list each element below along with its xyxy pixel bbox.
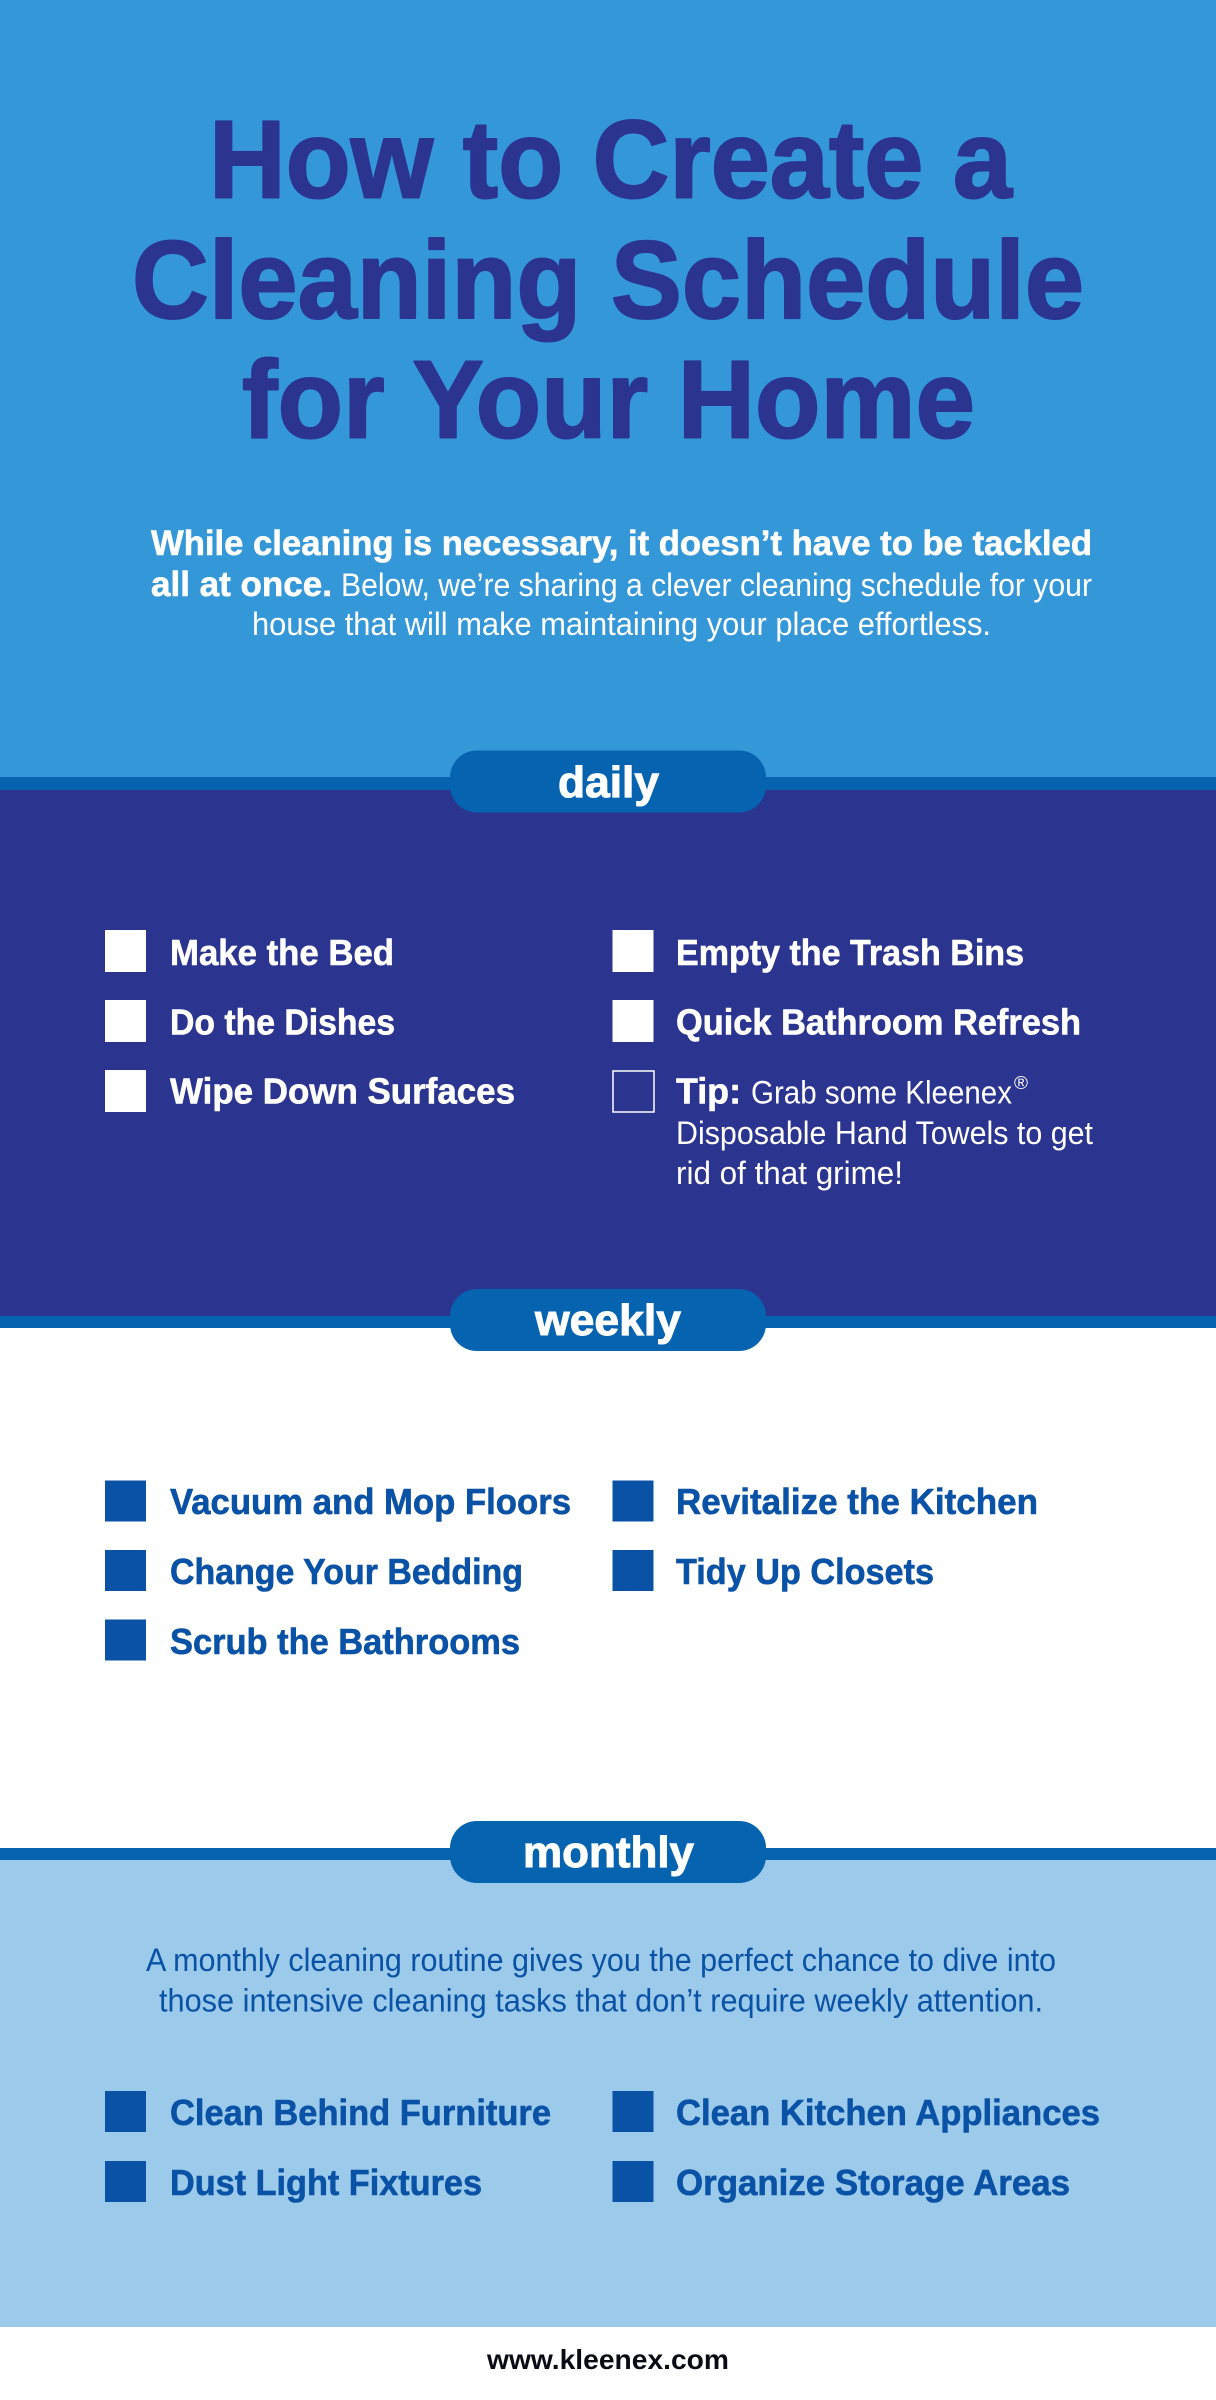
- monthly checklist right: Clean Kitchen Appliances: [676, 2092, 1100, 2133]
- tip: Tip:: [676, 1070, 741, 1112]
- intro text: While cleaning is necessary, it doesn’t have to be tackled: [151, 524, 1092, 563]
- weekly checklist right: [612, 1480, 1038, 1592]
- heading: weekly: weekly: [534, 1296, 682, 1345]
- monthly intro text: those intensive cleaning tasks that don’t require weekly attention.: [159, 1982, 1043, 2018]
- heading: daily: daily: [558, 758, 660, 807]
- monthly checklist right: Organize Storage Areas: [676, 2162, 1070, 2203]
- intro text: house that will make maintaining your place effortless.: [252, 606, 991, 642]
- monthly checklist left: [105, 2091, 551, 2203]
- tip: Grab some Kleenex: [751, 1074, 1012, 1110]
- heading: daily: [0, 750, 1216, 812]
- panel: monthly: [0, 1860, 1216, 2327]
- heading: monthly: [0, 1821, 1216, 1883]
- panel: weekly: [0, 1328, 1216, 1848]
- title: [132, 98, 1084, 462]
- intro text: [151, 524, 1092, 642]
- tip: ®: [1014, 1073, 1028, 1093]
- daily checklist left: Do the Dishes: [170, 1002, 395, 1042]
- daily checklist left: [105, 930, 515, 1112]
- weekly checklist right: Tidy Up Closets: [676, 1551, 934, 1592]
- daily checklist right: Empty the Trash Bins: [676, 932, 1024, 973]
- daily checklist right: [612, 930, 1081, 1042]
- title: Cleaning Schedule: [132, 219, 1084, 342]
- daily checklist left: Make the Bed: [170, 932, 394, 973]
- daily checklist left: Wipe Down Surfaces: [170, 1070, 515, 1112]
- monthly checklist left: Dust Light Fixtures: [170, 2162, 482, 2203]
- footer url: www.kleenex.com: [486, 2344, 729, 2375]
- weekly checklist left: Change Your Bedding: [170, 1551, 523, 1592]
- monthly checklist left: Clean Behind Furniture: [170, 2092, 551, 2133]
- heading: weekly: [0, 1289, 1216, 1351]
- title: How to Create a: [209, 98, 1013, 222]
- panel: header background: [0, 0, 1216, 777]
- monthly intro text: [146, 1942, 1056, 2018]
- weekly checklist left: [105, 1480, 571, 1662]
- heading: monthly: monthly: [523, 1828, 695, 1877]
- intro text: all at once.: [151, 565, 332, 604]
- weekly checklist right: Revitalize the Kitchen: [676, 1481, 1038, 1522]
- weekly checklist left: Vacuum and Mop Floors: [170, 1481, 571, 1522]
- panel: daily: [0, 789, 1216, 1316]
- monthly checklist right: [612, 2091, 1100, 2203]
- tip: rid of that grime!: [676, 1155, 903, 1191]
- title: for Your Home: [242, 338, 975, 462]
- tip: Disposable Hand Towels to get: [676, 1115, 1093, 1151]
- monthly intro text: A monthly cleaning routine gives you the perfect chance to dive into: [146, 1942, 1056, 1978]
- daily checklist right: Quick Bathroom Refresh: [676, 1002, 1081, 1042]
- tip: [613, 1070, 1093, 1191]
- intro text: Below, we’re sharing a clever cleaning schedule for your: [341, 567, 1092, 603]
- weekly checklist left: Scrub the Bathrooms: [170, 1621, 520, 1662]
